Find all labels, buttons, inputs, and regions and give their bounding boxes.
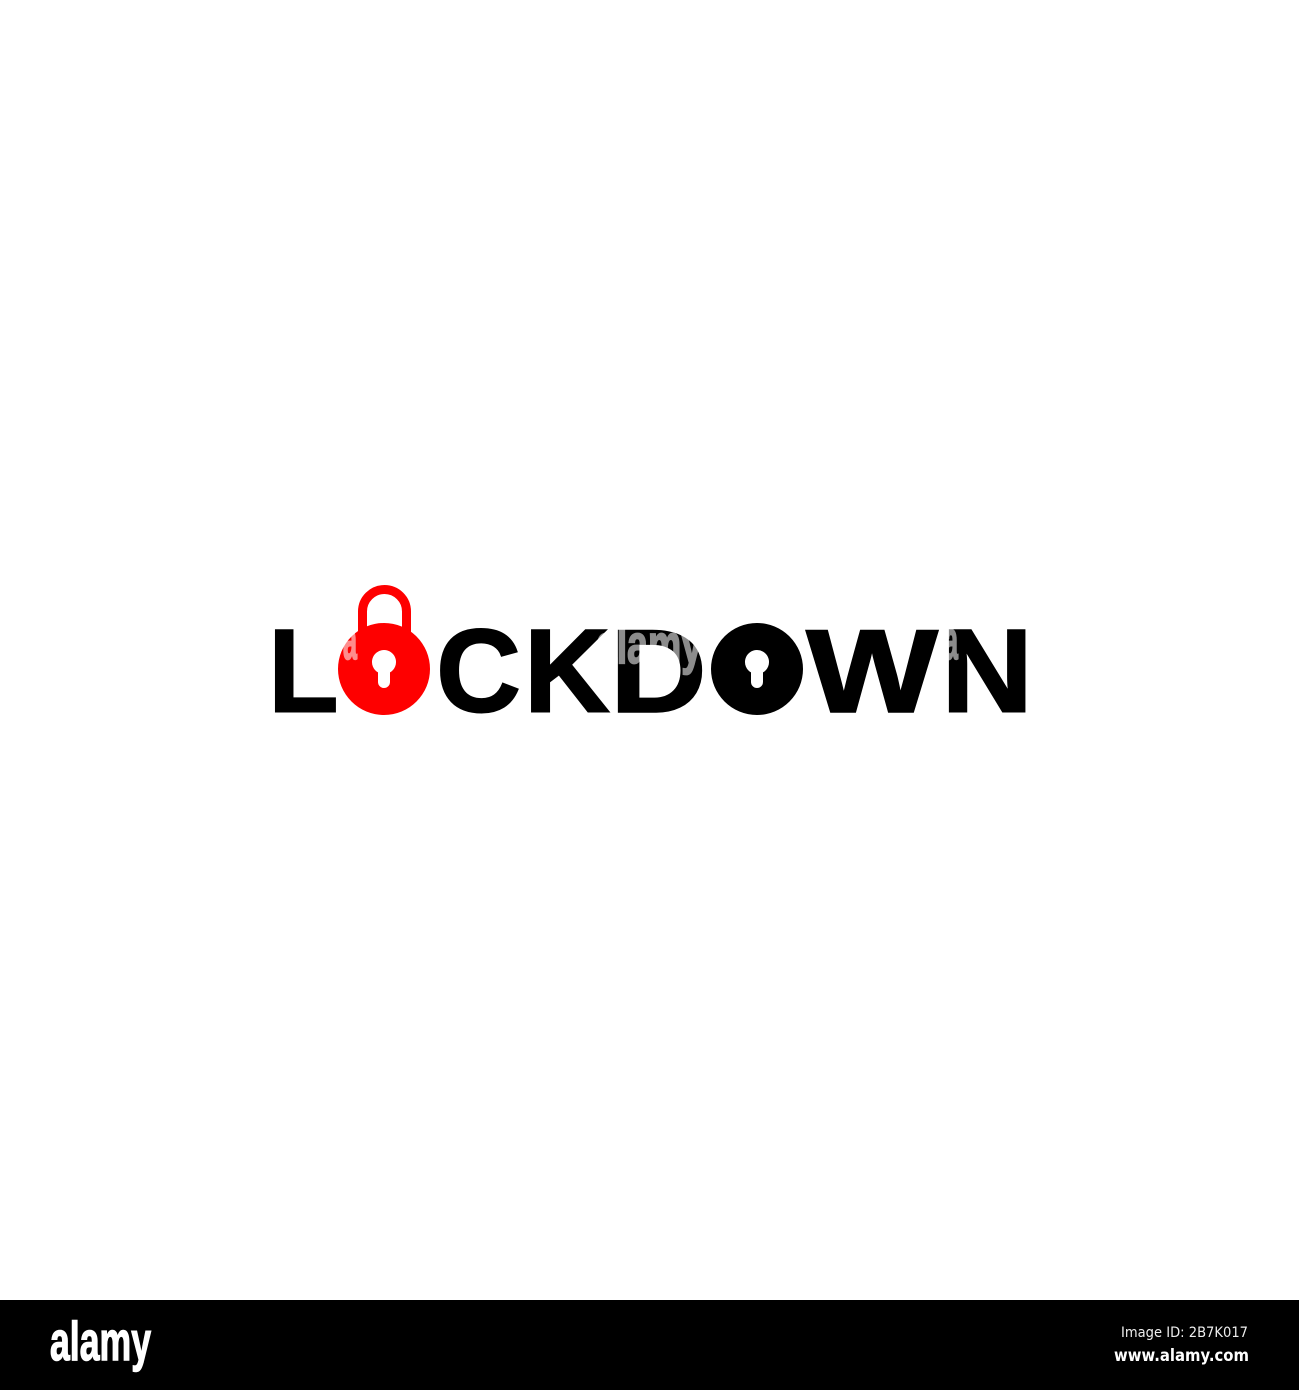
alamy logo: alamy bbox=[50, 1310, 151, 1372]
watermark: alamy over the wordmark: a bbox=[343, 609, 357, 671]
letter N: N bbox=[942, 605, 1033, 737]
letter C: C bbox=[436, 605, 521, 737]
footer background bbox=[0, 1300, 1299, 1390]
image id: Image ID: 2B7K017 bbox=[1121, 1325, 1248, 1341]
watermark: alamy over the wordmark bbox=[343, 609, 958, 675]
title wordmark: LOCKDOWN bbox=[268, 590, 1033, 737]
footer band bbox=[0, 1300, 1299, 1390]
padlock body with keyhole bbox=[338, 623, 430, 715]
website: www.alamy.com bbox=[1114, 1346, 1249, 1365]
padlock shackle bbox=[362, 590, 406, 640]
letter W: W bbox=[806, 606, 938, 737]
icon: black keyhole disc as letter O bbox=[711, 623, 803, 715]
icon: red padlock as letter O bbox=[338, 590, 430, 715]
infographic canvas: a bbox=[944, 609, 958, 671]
letter L: L bbox=[268, 605, 339, 737]
watermark centre: alamy bbox=[596, 613, 702, 675]
letter D: D bbox=[610, 605, 707, 737]
letter K: K bbox=[524, 605, 609, 737]
